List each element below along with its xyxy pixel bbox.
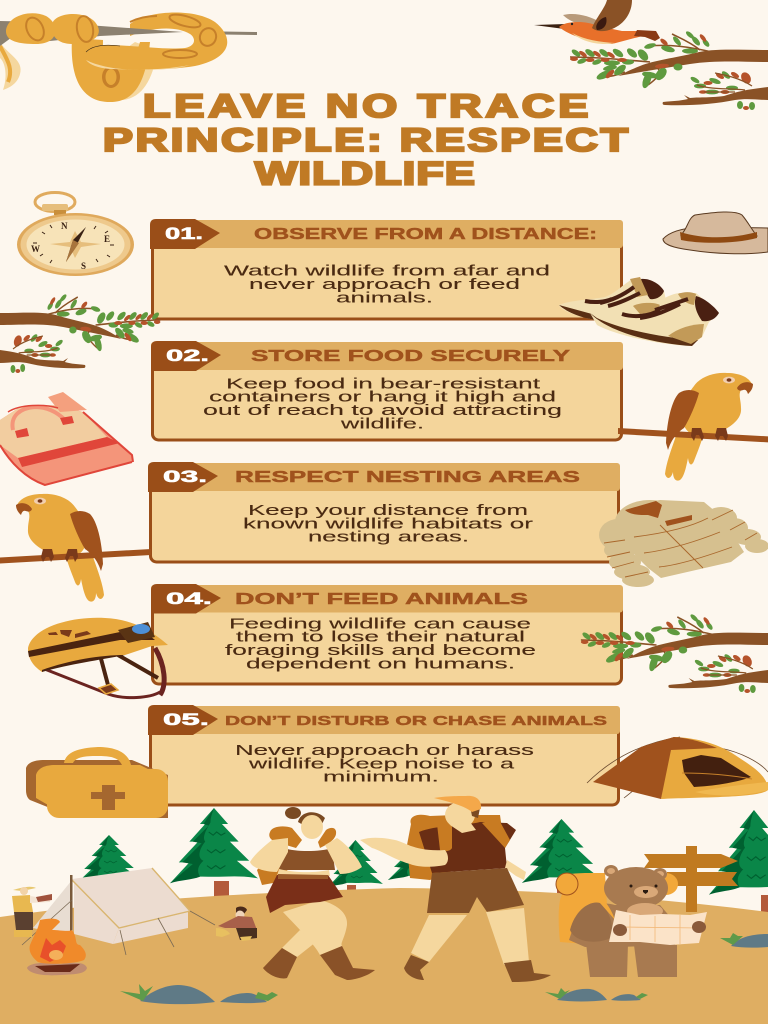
illustration: flying bird: [534, 0, 660, 44]
icon: dome tent: [587, 737, 768, 799]
panel: 02 store food securely: [151, 341, 623, 440]
title: WILDLIFE: [255, 157, 475, 192]
illustration: woman hiker: [250, 807, 375, 980]
panel: 04 don't feed animals: Feeding wildlife can cause: [229, 616, 531, 632]
panel: 02 store food securely: wildlife.: [339, 416, 424, 432]
panel: 05 don't disturb or chase animals: minimum.: [323, 770, 439, 786]
title: [103, 89, 628, 192]
illustration: bear with map: [556, 865, 707, 977]
panel: 04 don't feed animals: foraging skills and become: [225, 643, 536, 659]
panel: 01 observe from a distance: animals.: [336, 290, 433, 306]
icon: hat: [663, 212, 768, 254]
panel: 05 don't disturb or chase animals: 05.: [163, 710, 209, 729]
panel: 04 don't feed animals: them to lose their natural: [236, 630, 525, 646]
illustration: wooden sign post: [644, 846, 738, 912]
icon: backpack: [0, 392, 133, 485]
panel: 02 store food securely: Keep food in bear-resistant: [226, 376, 540, 392]
icon: hiking boots: [559, 277, 719, 346]
panel: 03 respect nesting areas: [148, 462, 620, 562]
illustration: crouching person: [216, 907, 257, 941]
panel: 02 store food securely: STORE FOOD SECURELY: [251, 348, 571, 365]
panel: 04 don't feed animals: dependent on humans.: [246, 656, 515, 672]
icon: compass: S: [81, 261, 86, 271]
illustration: tree branch left: [0, 293, 160, 373]
panel: 05 don't disturb or chase animals: DON’T DISTURB OR CHASE ANIMALS: [225, 713, 608, 728]
panel: 04 don't feed animals: [151, 584, 623, 684]
title: LEAVE NO TRACE: [143, 89, 588, 124]
panel: 04 don't feed animals: DON’T FEED ANIMALS: [235, 591, 529, 608]
illustration: person by the tent: [12, 887, 52, 937]
panel: 01 observe from a distance: 01.: [165, 224, 203, 243]
icon: climbing helmet: [28, 618, 168, 698]
icon: puffer jacket: [599, 500, 768, 587]
title: PRINCIPLE: RESPECT: [103, 123, 628, 158]
panel: 05 don't disturb or chase animals: Never approach or harass: [235, 743, 534, 759]
panel: 03 respect nesting areas: RESPECT NESTING AREAS: [235, 469, 581, 486]
panel: 03 respect nesting areas: Keep your distance from: [248, 503, 528, 519]
panel: 03 respect nesting areas: 03.: [163, 467, 207, 486]
icon: compass: W: [31, 244, 40, 254]
panel: 03 respect nesting areas: nesting areas.: [308, 530, 469, 546]
panel: 01 observe from a distance: [150, 219, 623, 319]
panel: 01 observe from a distance: Watch wildlife from afar and: [224, 264, 550, 280]
panel: 02 store food securely: containers or hang it high and: [209, 390, 556, 406]
panel: 01 observe from a distance: never approach or feed: [249, 277, 520, 293]
illustration: snake on branch: [0, 12, 257, 102]
rocks and grass: [120, 933, 768, 1004]
panel: 03 respect nesting areas: known wildlife habitats or: [243, 516, 533, 532]
panel: 05 don't disturb or chase animals: [148, 705, 620, 805]
icon: compass: E: [104, 234, 110, 244]
illustration: man hiker: [360, 796, 551, 982]
ground: [0, 888, 768, 1024]
illustration: tree branch top right: [570, 30, 768, 110]
illustration: canvas tent: [22, 868, 215, 955]
panel: 02 store food securely: 02.: [166, 346, 209, 365]
illustration: parrot on branch left: [0, 494, 151, 602]
illustration: parrot on branch right: [618, 373, 768, 481]
trees behind the ground: [78, 808, 768, 920]
icon: compass: N: [61, 221, 68, 231]
illustration: campfire: [27, 919, 87, 975]
icon: compass: [17, 192, 134, 276]
panel: 05 don't disturb or chase animals: wildlife. Keep noise to a: [247, 756, 516, 772]
panel: 01 observe from a distance: OBSERVE FROM A DISTANCE:: [254, 226, 597, 243]
panel: 04 don't feed animals: 04.: [166, 589, 212, 608]
icon: first aid bag: [26, 747, 168, 818]
illustration: tree branch right middle: [581, 613, 768, 693]
panel: 02 store food securely: out of reach to avoid attracting: [203, 403, 562, 419]
